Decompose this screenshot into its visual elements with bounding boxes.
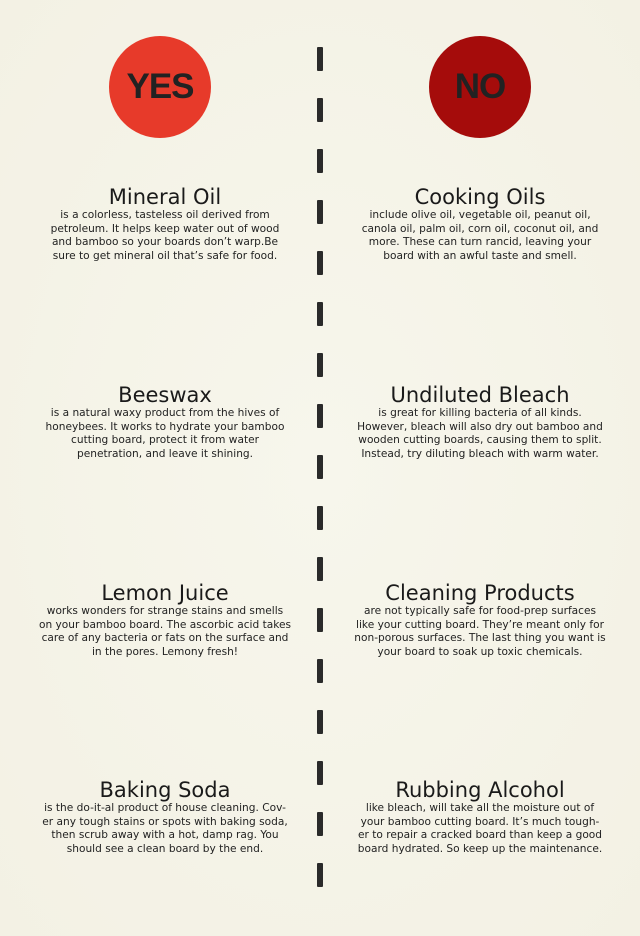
dashed divider [317, 47, 323, 887]
yes: lemon juice: care of any bacteria or fats on the surface and [42, 632, 288, 644]
no: undiluted bleach: wooden cutting boards, causing them to split. [358, 434, 602, 446]
no: cleaning products [354, 581, 606, 658]
no: rubbing alcohol: your bamboo cutting board. It’s much tough- [361, 816, 599, 828]
YES circle [109, 36, 211, 138]
no: cooking oils: canola oil, palm oil, corn oil, coconut oil, and [362, 223, 598, 235]
yes: beeswax: is a natural waxy product from the hives of [51, 407, 279, 419]
YES circle: YES [126, 67, 194, 106]
no: cooking oils: Cooking Oils [415, 185, 545, 209]
no: cleaning products: your board to soak up toxic chemicals. [377, 646, 583, 658]
yes: beeswax: honeybees. It works to hydrate your bamboo [46, 421, 284, 433]
yes: baking soda: then scrub away with a hot, damp rag. You [51, 829, 279, 841]
no: cooking oils: include olive oil, vegetable oil, peanut oil, [369, 209, 591, 221]
no: cleaning products: are not typically safe for food-prep surfaces [364, 605, 596, 617]
no: cleaning products: Cleaning Products [385, 581, 575, 605]
NO circle: NO [455, 67, 505, 106]
yes: mineral oil: petroleum. It helps keep water out of wood [51, 223, 279, 235]
no: rubbing alcohol: er to repair a cracked board than keep a good [358, 829, 602, 841]
yes: lemon juice [39, 581, 291, 658]
no: rubbing alcohol: Rubbing Alcohol [395, 778, 565, 802]
yes: beeswax: penetration, and leave it shining. [77, 448, 253, 460]
no: undiluted bleach: Instead, try diluting bleach with warm water. [361, 448, 599, 460]
no: rubbing alcohol: board hydrated. So keep up the maintenance. [358, 843, 602, 855]
yes: lemon juice: on your bamboo board. The ascorbic acid takes [39, 619, 291, 631]
no: cooking oils: board with an awful taste and smell. [383, 250, 577, 262]
yes: mineral oil [51, 185, 279, 262]
yes: lemon juice: Lemon Juice [101, 581, 229, 605]
no: undiluted bleach: Undiluted Bleach [390, 383, 570, 407]
no: rubbing alcohol: like bleach, will take all the moisture out of [366, 802, 594, 814]
no: undiluted bleach: However, bleach will also dry out bamboo and [357, 421, 603, 433]
yes: lemon juice: in the pores. Lemony fresh! [92, 646, 238, 658]
yes: beeswax: cutting board, protect it from water [71, 434, 259, 446]
yes: mineral oil: sure to get mineral oil that’s safe for food. [53, 250, 277, 262]
yes: beeswax [46, 383, 284, 460]
yes: beeswax: Beeswax [118, 383, 212, 407]
yes: mineral oil: and bamboo so your boards don’t warp.Be [52, 236, 278, 248]
no: cleaning products: like your cutting board. They’re meant only for [356, 619, 604, 631]
yes: mineral oil: Mineral Oil [109, 185, 221, 209]
yes: baking soda: er any tough stains or spots with baking soda, [42, 816, 288, 828]
yes: baking soda: is the do-it-al product of house cleaning. Cov- [44, 802, 286, 814]
yes: baking soda [42, 778, 288, 855]
no: cooking oils: more. These can turn rancid, leaving your [369, 236, 591, 248]
no: cooking oils [362, 185, 598, 262]
NO circle [429, 36, 531, 138]
yes: baking soda: should see a clean board by the end. [67, 843, 263, 855]
no: undiluted bleach: is great for killing bacteria of all kinds. [378, 407, 582, 419]
no: undiluted bleach [357, 383, 603, 460]
yes: lemon juice: works wonders for strange stains and smells [47, 605, 283, 617]
yes: baking soda: Baking Soda [100, 778, 230, 802]
yes: mineral oil: is a colorless, tasteless oil derived from [60, 209, 270, 221]
no: rubbing alcohol [358, 778, 602, 855]
no: cleaning products: non-porous surfaces. The last thing you want is [354, 632, 606, 644]
